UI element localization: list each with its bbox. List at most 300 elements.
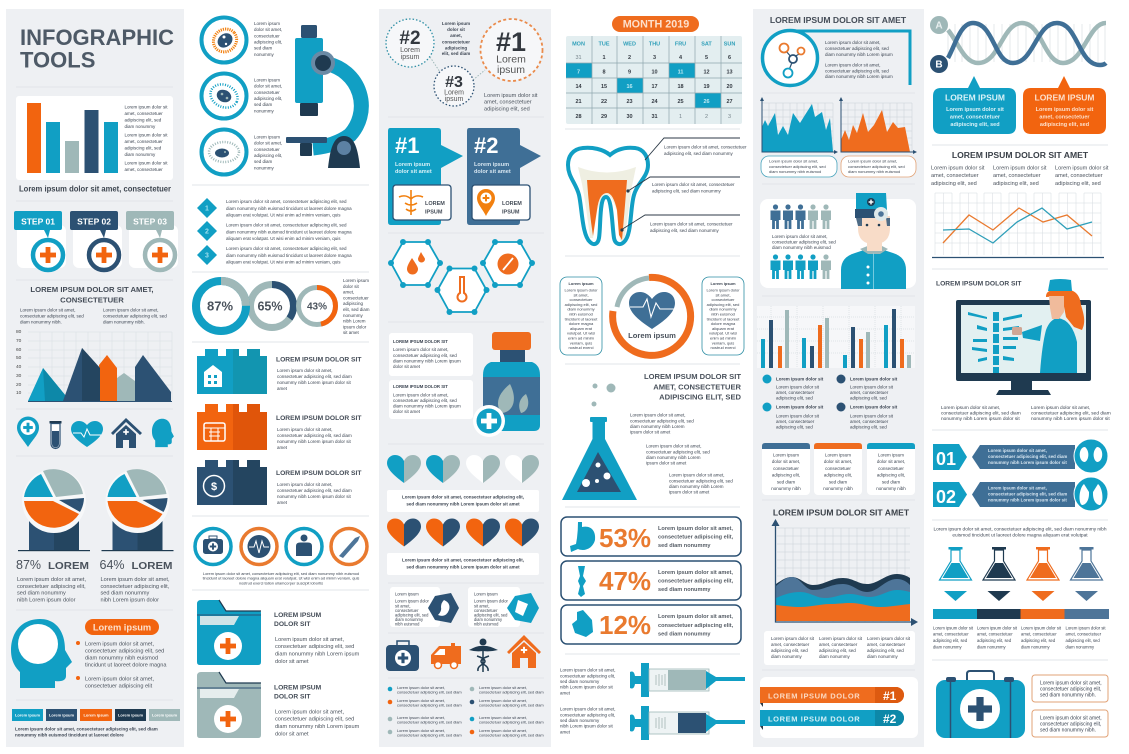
heading: mountain chart: LOREM IPSUM DOLOR SIT AMET, (30, 285, 154, 294)
building block 2: Lorem ipsum dolor sit amet, (277, 427, 333, 432)
callout card #2: LOREM (502, 201, 522, 207)
donut text: adipiscing (343, 301, 364, 306)
note: right: sit amet, (715, 292, 731, 297)
rank 3 (434, 66, 474, 106)
bullet list: consectetuer adipiscing elit, sed (85, 648, 164, 654)
hex note: document: diam nonummy (474, 617, 503, 622)
card 3: sed diam (882, 480, 900, 484)
tooth text: Lorem ipsum dolor sit amet, consectetuer (652, 182, 735, 187)
folder 1: LOREM IPSUM (274, 612, 322, 619)
calendar grid: 16 (626, 84, 633, 90)
card 2: sed diam (829, 480, 847, 484)
microbe text: consectetuer (254, 34, 280, 38)
note: left: Lorem ipsum dolor (564, 288, 598, 292)
progress ring: Lorem ipsum (628, 331, 676, 340)
medical icon circles (195, 528, 367, 585)
molecule block: Lorem ipsum dolor sit amet, (825, 62, 881, 68)
pie chart 2 label: Lorem ipsum dolor sit amet, (100, 577, 170, 583)
hex note: stomach: Lorem ipsum (395, 592, 419, 596)
heading: stacked area: LOREM IPSUM DOLOR SIT AMET (773, 508, 910, 518)
callout blue: Lorem ipsum dolor sit (946, 107, 1004, 113)
flask text: adipiscing elit, sed (933, 638, 968, 643)
chart label orange: diam nonummy nibh euismod (848, 169, 900, 174)
head with bullets (11, 619, 167, 690)
flask steel (1070, 547, 1102, 601)
bullet list: diam nonummy nibh euismod (85, 656, 158, 662)
stacked area text: adipiscing elit, sed (867, 648, 904, 653)
medicine bottle (473, 332, 540, 437)
donut 65% (250, 284, 294, 328)
folder 1: diam nonummy nibh Lorem ipsum (275, 652, 360, 658)
rank 2: #2 (399, 28, 421, 49)
calendar grid: 6 (728, 55, 731, 61)
colour legend: Lorem ipsum dolor sit amet, consectetuer adipiscing elit, sed diam (15, 726, 158, 732)
rank 1: Lorem (496, 54, 526, 66)
heart row 2 caption (387, 553, 539, 575)
note: left: nibh euismod (569, 312, 593, 316)
diamond list text: diam nonummy nibh euismod tincidunt ut laoreet dolore magna (226, 253, 352, 258)
panel: column 3 background (379, 9, 551, 747)
rank text: amet, (450, 33, 462, 38)
rank text: adipiscing (445, 46, 467, 50)
flask text: diam nonummy (977, 644, 1007, 650)
donut 65%: 65% (257, 300, 283, 314)
stat 53%: sed diam nonummy (658, 543, 711, 549)
calendar grid: 3 (728, 114, 731, 120)
bar chart legend: adipiscing elit, sed (776, 396, 813, 400)
month pill: MONTH 2019 (623, 18, 689, 30)
stat 53%: consectetuer adipiscing elit, (658, 534, 734, 540)
callout orange: amet, consectetuer (1039, 114, 1090, 120)
molecule block: diam nonummy nibh Lorem ipsum (825, 74, 893, 79)
stat 47%: Lorem ipsum dolor sit amet, (658, 570, 733, 576)
stacked area text: Lorem ipsum dolor sit (867, 636, 911, 641)
card 3 (867, 443, 915, 495)
icon: heart with pulse (71, 421, 103, 447)
building block 2: LOREM IPSUM DOLOR SIT (276, 415, 362, 422)
hex note: document: Lorem ipsum dolor (474, 598, 509, 604)
calendar grid: 31 (575, 55, 582, 61)
heading: mountain chart: CONSECTETUER (60, 296, 124, 304)
bullet list: Lorem ipsum dolor sit amet, (85, 676, 154, 682)
callout card #2: Lorem ipsum (474, 162, 509, 168)
pie chart 2 label (100, 558, 172, 604)
stat 53%: Lorem ipsum dolor sit amet, (658, 526, 733, 532)
bar chart legend: Lorem ipsum dolor sit (776, 404, 824, 410)
row 01: nonummy nibh Lorem ipsum dolor sit (988, 460, 1067, 465)
card 1: consectetuer (773, 466, 799, 471)
ribbon 1: LOREM IPSUM DOLOR (768, 692, 860, 700)
building block 1 (197, 349, 362, 394)
callout card #2: IPSUM (502, 210, 520, 216)
molecule block: consectetuer adipiscing elit, sed (825, 46, 889, 51)
line chart (932, 193, 1104, 258)
stacked area text: adipiscing elit, sed (819, 648, 856, 653)
flask orange (1027, 547, 1059, 601)
rank 2: Lorem (400, 47, 420, 54)
mountain area chart: 30 (16, 373, 22, 379)
calendar grid: 19 (703, 84, 710, 90)
stat 12%: sed diam nonummy (658, 632, 711, 638)
calendar grid: 2 (628, 55, 631, 61)
line chart text: Lorem ipsum dolor sit (1055, 166, 1109, 172)
note 1: diam nonummy nibh Lorem ipsum (393, 358, 461, 364)
pie chart 1 label: consectetuer adipiscing elit, (17, 584, 86, 590)
bar chart legend: adipiscing elit, sed (850, 396, 887, 400)
bullet legend: Lorem ipsum dolor sit amet, (397, 728, 445, 733)
heart row 2 (387, 518, 539, 546)
building block 3: LOREM IPSUM DOLOR SIT (276, 470, 362, 477)
callout card #1: IPSUM (425, 210, 443, 216)
syringe 1: consectetuer adipiscing elit, (560, 674, 615, 678)
note 2: consectetuer adipiscing elit, sed (393, 398, 457, 403)
building block 3: Lorem ipsum dolor sit amet, (277, 482, 333, 487)
icon: tooth (568, 148, 648, 244)
bar chart text: Lorem ipsum dolor sit (124, 104, 168, 110)
mountain area chart: 50 (16, 355, 22, 361)
heart ring section (560, 277, 744, 355)
bar chart legend (762, 374, 898, 430)
syringe 2: Lorem ipsum dolor sit amet, (560, 706, 616, 712)
flask text: ipsum dolor sit amet (630, 430, 671, 434)
chart label blue: diam nonummy nibh euismod (769, 169, 821, 174)
diamond 2: 2 (205, 228, 209, 236)
syringe 1: Lorem ipsum dolor sit amet, (560, 668, 616, 672)
colour legend: Lorem ipsum (49, 712, 74, 718)
tooth diagram (568, 138, 747, 244)
strand label A (930, 16, 948, 34)
syringe 2: nibh Lorem ipsum dolor sit (560, 724, 614, 728)
flask text: diam nonummy nibh Lorem (669, 484, 724, 489)
note: left: veniam, quis (570, 340, 592, 345)
mountain chart text: consectetuer adipiscing elit, sed (103, 314, 167, 318)
people text: Lorem ipsum dolor sit amet, (772, 234, 828, 239)
note 1 (389, 333, 473, 376)
progress ring (613, 277, 691, 355)
icon: orange microbe (202, 18, 246, 62)
building block 3: consectetuer adipiscing elit, sed diam (277, 488, 352, 493)
heart row 2 caption: sed diam nonummy nibh Lorem ipsum dolor sit amet (406, 564, 520, 570)
pie chart 2 label: consectetuer adipiscing elit, (100, 584, 170, 590)
note: right (702, 277, 744, 355)
ribbon 1: #1 (883, 689, 897, 703)
icon: house (111, 418, 142, 448)
card 3: consectetuer (878, 466, 904, 471)
syringe 1: nibh Lorem ipsum dolor sit (560, 684, 614, 690)
syringe 1: amet (560, 690, 571, 696)
folder 2: dolor sit amet (275, 732, 309, 738)
row 02: 02 (936, 487, 956, 507)
calendar grid: 2 (705, 114, 708, 120)
colour legend: Lorem ipsum (15, 712, 40, 718)
icon row text: Lorem ipsum dolor sit amet, consectetuer adipiscing elit, sed diam nonummy nibh euismod (203, 571, 359, 576)
kit note 1: sed diam nonummy nibh. (1040, 692, 1096, 698)
icon row text: tincidunt ut laoreet dolore magna aliquam erat volutpat. Ut wisi enim ad minim veniam, quis (203, 576, 359, 581)
building block 1: consectetuer adipiscing elit, sed diam (277, 374, 352, 379)
card 2: dolor sit amet, (824, 459, 852, 464)
bar chart legend: Lorem ipsum dolor sit (776, 376, 824, 382)
heart row 1 caption: Lorem ipsum dolor sit amet, consectetuer adipiscing elit, (402, 494, 524, 500)
kit note 1: Lorem ipsum dolor sit amet, (1040, 680, 1102, 686)
diamond 3: 3 (205, 252, 209, 260)
line chart text: amet, consectetuer (931, 173, 979, 179)
stacked area text: amet, consectetuer (771, 642, 810, 647)
rank 1: #1 (496, 27, 526, 57)
kit note 1 (1032, 675, 1108, 702)
hexagon: drops (388, 239, 443, 288)
tooth text: adipiscing elit, sed diam nonummy (652, 188, 722, 194)
chart label blue (761, 156, 837, 177)
calendar grid: SAT (701, 42, 712, 48)
building block 3: nonummy nibh Lorem ipsum dolor sit (277, 494, 352, 499)
callout blue: LOREM IPSUM (945, 92, 1005, 102)
flask blue (940, 547, 972, 601)
ribbon 1 (760, 687, 904, 707)
building block 2: consectetuer adipiscing elit, sed diam (277, 433, 352, 438)
bar chart legend: Lorem ipsum dolor sit (850, 384, 894, 390)
diamond list text: aliquam erat volutpat. Ut wisi enim ad minim veniam, quis (226, 260, 341, 264)
microbe text: Lorem ipsum (254, 78, 280, 82)
mountain area chart (16, 329, 172, 402)
callout card #1: #1 (395, 133, 419, 158)
flask text: Lorem ipsum dolor sit amet, (669, 472, 725, 478)
molecule block (762, 30, 910, 86)
area chart blue (760, 97, 838, 154)
folder 2: consectetuer adipiscing elit, sed (275, 716, 354, 722)
x-ray ribs (968, 312, 1022, 373)
note: left: tincidunt ut laoreet (565, 316, 598, 321)
strand label B (930, 55, 948, 73)
callout card #1: dolor sit amet (395, 169, 432, 175)
pie chart 1 (18, 469, 90, 551)
line chart text: Lorem ipsum dolor sit (931, 166, 985, 172)
syringe 1 (560, 663, 745, 697)
hex note: document: consectetuer (474, 608, 498, 613)
molecule block: Lorem ipsum dolor sit amet, (825, 40, 881, 45)
colour legend: Lorem ipsum (83, 712, 109, 718)
card 1: dolor sit amet, (772, 459, 800, 464)
callout blue (933, 76, 1016, 134)
icon: medical kit (195, 528, 231, 564)
flask text: ipsum dolor sit amet (646, 460, 687, 466)
note: left: nostrud exerci (568, 345, 594, 350)
row 01: Lorem ipsum dolor sit amet, (988, 448, 1047, 453)
bullet legend: consectetuer adipiscing elit, sed diam (479, 720, 544, 724)
heading: molecule: LOREM IPSUM DOLOR SIT AMET (770, 15, 907, 25)
rank 1 (480, 19, 542, 81)
note: right: diam nonummy (709, 307, 737, 312)
step 03: STEP 03 (133, 216, 167, 226)
stacked area text: diam nonummy (819, 654, 851, 659)
mountain chart text: diam nonummy nibh. (103, 320, 145, 324)
syringe 1: sed diam nonummy (560, 679, 600, 684)
note: right: consectetuer (712, 297, 735, 302)
calendar grid: 22 (601, 99, 607, 105)
hex note: document: sit amet, (474, 604, 489, 608)
line chart text: amet, consectetuer (993, 173, 1041, 179)
note: left (560, 277, 602, 355)
tooth text: Lorem ipsum dolor sit amet, consectetuer (650, 222, 733, 226)
bar chart text: amet, consectetuer (124, 167, 163, 172)
calendar grid: 9 (628, 70, 631, 76)
calendar grid: 17 (651, 84, 658, 90)
calendar grid: 5 (705, 55, 708, 61)
doctor figure (841, 193, 906, 289)
microbe text: dolor sit amet, (254, 84, 282, 88)
rank 3: #3 (445, 74, 463, 91)
calendar grid: 4 (679, 55, 683, 61)
callout orange: adipiscing elit, sed (1040, 122, 1089, 128)
microbe text: sed diam (254, 159, 273, 164)
monitor with doctor (956, 279, 1091, 395)
building block 2: nonummy nibh Lorem ipsum dolor sit (277, 439, 352, 444)
building block 1: amet (277, 386, 288, 391)
bar chart legend: amet, consectetuer (850, 419, 889, 424)
folder 1: consectetuer adipiscing elit, sed (275, 644, 354, 650)
syringe 2 (560, 706, 745, 740)
pie chart 1 label (16, 558, 89, 604)
heart row 2 caption: Lorem ipsum dolor sit amet, consectetuer adipiscing elit, (402, 558, 524, 562)
folder 2: diam nonummy nibh Lorem ipsum (275, 724, 360, 730)
numbered diamonds list (197, 198, 352, 265)
bullet legend: Lorem ipsum dolor sit amet, (479, 698, 527, 703)
people text: diam nonummy nibh euismod (772, 245, 831, 250)
note: right: aliquam erat (712, 326, 735, 331)
donut text: ipsum dolor (343, 324, 367, 329)
line chart text: adipiscing elit, sed (931, 181, 977, 187)
flask text: adipiscing elit, sed (977, 638, 1012, 643)
month pill (612, 16, 699, 32)
hex note: stomach: adipiscing elit, sed (395, 612, 429, 618)
flask text: Lorem ipsum dolor sit amet, (630, 412, 686, 418)
chart label orange: consectetuer adipiscing elit, sed (848, 164, 905, 169)
bar chart caption: Lorem ipsum dolor sit amet, consectetuer (19, 184, 171, 194)
bar chart text: amet, consectetuer (124, 139, 163, 144)
card 1: nonummy nibh (771, 486, 801, 491)
bar chart text: adipiscing elit, sed (124, 146, 162, 150)
mountain area chart: 60 (16, 347, 22, 353)
note: left: consectetuer (570, 297, 593, 302)
molecule block: diam nonummy nibh Lorem ipsum (825, 52, 893, 57)
building block 1: LOREM IPSUM DOLOR SIT (276, 356, 362, 364)
hex note: document: adipiscing elit, sed (474, 612, 508, 618)
row 02 (933, 477, 1108, 511)
line chart text: adipiscing elit, sed (1055, 181, 1101, 187)
row 02: nonummy nibh Lorem ipsum dolor sit (988, 498, 1067, 502)
hex note: stomach: sit amet, (395, 604, 410, 608)
diamond list text: Lorem ipsum dolor sit amet, consectetuer adipiscing elit, sed (226, 199, 347, 204)
bullet list (76, 641, 167, 690)
pie chart 1 label: sed diam nonummy (17, 590, 66, 596)
microbe text: nonummy (254, 52, 275, 57)
rank 2 (386, 19, 434, 67)
mountain chart text: Lorem ipsum dolor sit amet, (103, 308, 159, 312)
note: right: nibh euismod (711, 312, 735, 316)
stacked area text: diam nonummy (867, 654, 899, 659)
bullet legend: consectetuer adipiscing elit, sed diam (479, 702, 544, 708)
microbe text: nonummy (254, 166, 275, 170)
rank caption: amet, consectetuer (484, 100, 532, 106)
icon: orange pin (477, 189, 495, 216)
doctor panel (760, 193, 916, 289)
hex note: stomach: consectetuer (395, 608, 419, 613)
row 02: Lorem ipsum dolor sit amet, (988, 486, 1047, 490)
diamond list text: diam nonummy nibh euismod tincidunt ut laoreet dolore magna (226, 230, 352, 234)
stat 47%: consectetuer adipiscing elit, (658, 578, 734, 584)
flask text: diam nonummy nibh Lorem (646, 455, 701, 460)
donut text: dolor sit (343, 284, 360, 289)
flask text: Lorem ipsum dolor sit (933, 626, 974, 630)
syringe 2: consectetuer adipiscing elit, (560, 712, 615, 718)
colour legend: Lorem ipsum (152, 712, 177, 718)
calendar grid: MON (572, 42, 585, 48)
pie chart 2 (102, 469, 174, 551)
hexagon: flask (434, 266, 490, 315)
mountain chart text: Lorem ipsum dolor sit amet, (20, 308, 76, 312)
flask text: adipiscing elit, sed (1021, 638, 1056, 643)
icon: blue microbe (202, 74, 246, 118)
tooth leader lines (620, 138, 740, 232)
step 01 (14, 211, 66, 270)
note 2 (389, 380, 473, 419)
icon: ambulance (431, 643, 461, 668)
flask text: consectetuer adipiscing elit, sed (669, 478, 733, 484)
monitor text: nonummy nibh Lorem ipsum dolor sit (1031, 416, 1110, 422)
flask text: amet, consectetuer (1021, 632, 1057, 636)
note 2: dolor sit amet (393, 409, 421, 414)
donut text: sit amet (343, 330, 360, 335)
molecule block: consectetuer adipiscing elit, sed (825, 68, 889, 74)
note: right: volutpat. Ut wisi (709, 331, 737, 336)
calendar grid: 14 (575, 84, 582, 90)
calendar grid: 30 (626, 114, 633, 120)
icon row text: nostrud exerci tation ullamcorper suscipit lobortis (239, 580, 323, 585)
stat 53% (561, 517, 741, 556)
icon: map pin (17, 416, 39, 447)
hex note: stomach: Lorem ipsum dolor (395, 598, 430, 604)
note 1: consectetuer adipiscing elit, sed (393, 353, 457, 358)
note: left: diam nonummy (567, 307, 595, 312)
colour legend: Lorem ipsum (118, 712, 143, 718)
three cards (762, 443, 915, 495)
card 1: adipiscing elit, (772, 472, 800, 478)
icon: first aid kit (386, 641, 419, 671)
segmented bar (933, 609, 1109, 619)
monitor text: consectetuer adipiscing elit, sed diam (1031, 410, 1111, 416)
folder 2: DOLOR SIT (274, 694, 311, 700)
bar chart legend: Lorem ipsum dolor sit (850, 414, 894, 418)
pie chart 1 label: LOREM (48, 561, 89, 572)
rank 3: Lorem (444, 90, 464, 96)
row 01 (933, 439, 1108, 473)
mountain area chart: 10 (16, 390, 22, 396)
note: right: dolore magna (711, 321, 736, 326)
stat 47%: 47% (599, 566, 651, 596)
donut text: elit, sed diam (343, 307, 370, 312)
microbe text: nonummy (254, 108, 275, 114)
pie chart 1 label: 87% (16, 558, 41, 572)
calendar grid: 18 (677, 84, 684, 90)
heart row 1 caption (387, 490, 539, 512)
line chart text: Lorem ipsum dolor sit (993, 166, 1047, 172)
diamond 2 (197, 221, 217, 241)
row 01: 01 (936, 449, 956, 469)
callout card #1: Lorem ipsum (395, 162, 430, 168)
folder 1 (197, 600, 360, 665)
calendar grid: WED (623, 42, 636, 48)
calendar grid: 1 (602, 55, 606, 61)
folder 1: Lorem ipsum dolor sit amet, (275, 637, 344, 643)
